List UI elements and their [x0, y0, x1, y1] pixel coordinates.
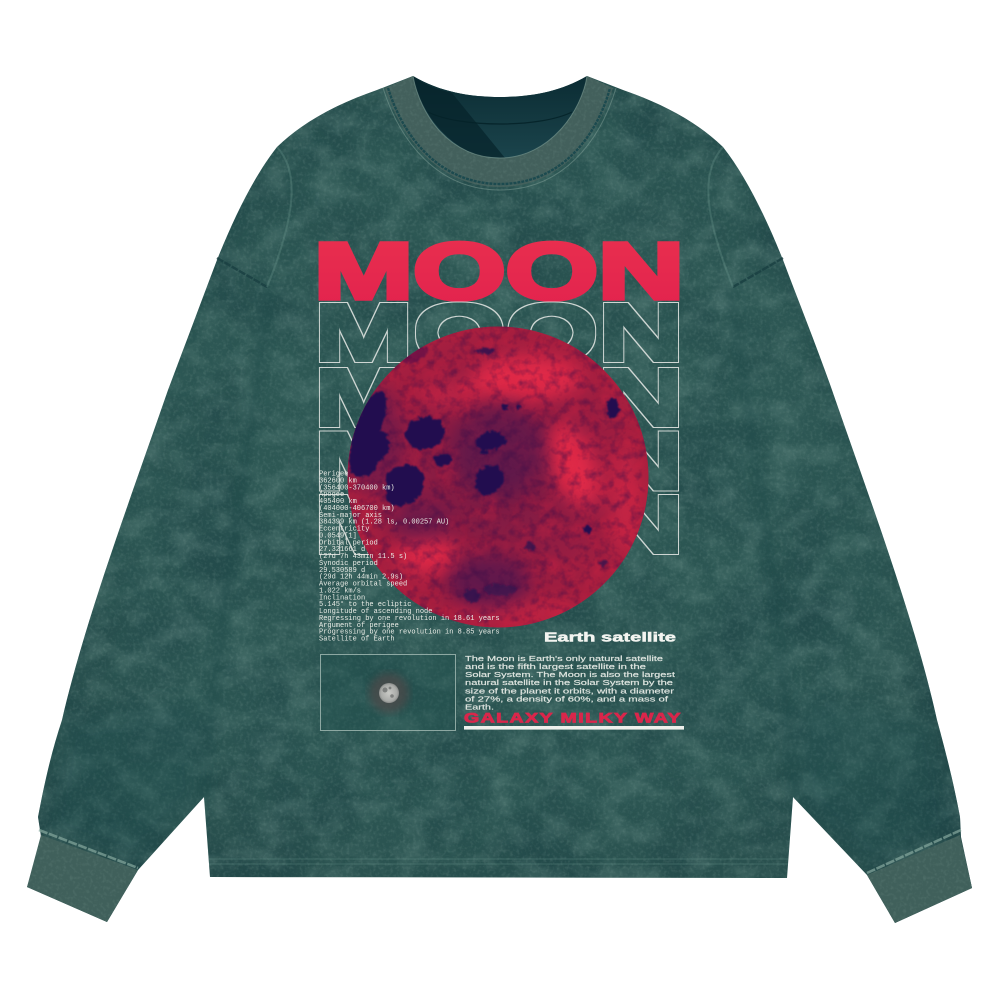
description paragraph: Solar System. The Moon is also the largest	[465, 670, 676, 679]
dark maria	[350, 344, 619, 603]
orbital data text block: Satellite of Earth	[319, 636, 395, 644]
orbital data text block: Synodic period	[319, 560, 378, 568]
description paragraph: Earth.	[465, 702, 494, 712]
collar inner highlight	[413, 76, 587, 158]
orbital data text block: (356400-370400 km)	[319, 484, 395, 492]
photo frame	[320, 654, 456, 730]
orbital data text block: Perigee	[319, 470, 348, 478]
outline row 4: MOON	[314, 480, 684, 569]
collar outer highlight	[383, 88, 616, 190]
description paragraph: The Moon is Earth's only natural satellite	[465, 654, 663, 663]
left shoulder fold	[267, 147, 292, 287]
dim purple central region	[347, 385, 548, 608]
orbital data text block: 405400 km	[319, 498, 357, 506]
orbital data text block: 0.0549[1]	[319, 532, 357, 540]
description paragraph: natural satellite in the Solar System by the	[465, 678, 673, 687]
description paragraph: size of the planet it orbits, with a diameter	[465, 686, 675, 695]
orbital data text block: Inclination	[319, 594, 365, 602]
orbital data text block: Progressing by one revolution in 8.85 years	[319, 629, 500, 637]
description paragraph	[465, 654, 676, 712]
right cuff seam	[867, 830, 961, 873]
inner back neck tape seam	[428, 112, 572, 124]
right cuff	[867, 835, 972, 923]
orbital data text block: 362600 km	[319, 477, 357, 485]
moon halo	[369, 673, 409, 713]
description paragraph: of 27%, a density of 60%, and a mass of	[465, 694, 669, 703]
orbital data text block: Eccentricity	[319, 526, 369, 534]
left cuff	[27, 835, 138, 922]
right shoulder seam	[733, 258, 783, 287]
small moon	[379, 683, 399, 703]
orbital data text block: (27d 7h 43min 11.5 s)	[319, 553, 407, 561]
left shoulder seam	[217, 258, 267, 287]
outline row 2: MOON	[314, 353, 684, 442]
neck shadow	[413, 76, 505, 158]
hem stitching	[209, 859, 788, 864]
orbital data text block: Semi-major axis	[319, 512, 382, 520]
description paragraph: and is the fifth largest satellite in the	[465, 662, 646, 671]
red moon image	[348, 326, 648, 628]
neck interior	[413, 76, 587, 158]
subheading: GALAXY MILKY WAY: GALAXY MILKY WAY	[464, 710, 682, 726]
orbital data text block: 29.530589 d	[319, 567, 365, 575]
outlined repeated MOON words	[314, 288, 684, 569]
orbital data text block: 27.321661 d	[319, 546, 365, 554]
orbital data text block: (404000-406700 km)	[319, 505, 395, 513]
orbital data text block: Longitude of ascending node	[319, 608, 432, 616]
white underline bar	[464, 726, 684, 730]
orbital data text block: 5.145° to the ecliptic	[319, 600, 411, 609]
outline row 1: MOON	[314, 288, 684, 377]
orbital data text block: Average orbital speed	[319, 580, 407, 588]
orbital data text block: 1.022 km/s	[319, 587, 361, 595]
outline row 3: MOON	[314, 416, 684, 506]
bright highland patches	[398, 356, 639, 622]
heading: Earth satellite: Earth satellite	[544, 630, 676, 644]
collar ribbing	[385, 76, 613, 187]
orbital data text block: Argument of perigee	[319, 622, 399, 630]
orbital data text block: Apogee	[319, 491, 344, 499]
orbital data text block: Orbital period	[319, 539, 378, 547]
collar seam	[388, 88, 610, 184]
orbital data text block: Regressing by one revolution in 18.61 years	[319, 615, 500, 623]
orbital data text block: 384399 km (1.28 ls, 0.00257 AU)	[319, 519, 449, 527]
small moon markings	[382, 687, 394, 698]
orbital data text block: (29d 12h 44min 2.9s)	[319, 574, 403, 582]
framed small moon photo	[320, 654, 456, 730]
left cuff seam	[39, 830, 138, 868]
title: MOON: MOON	[314, 226, 684, 316]
right shoulder fold	[708, 147, 733, 287]
orbital data text block	[319, 470, 500, 644]
